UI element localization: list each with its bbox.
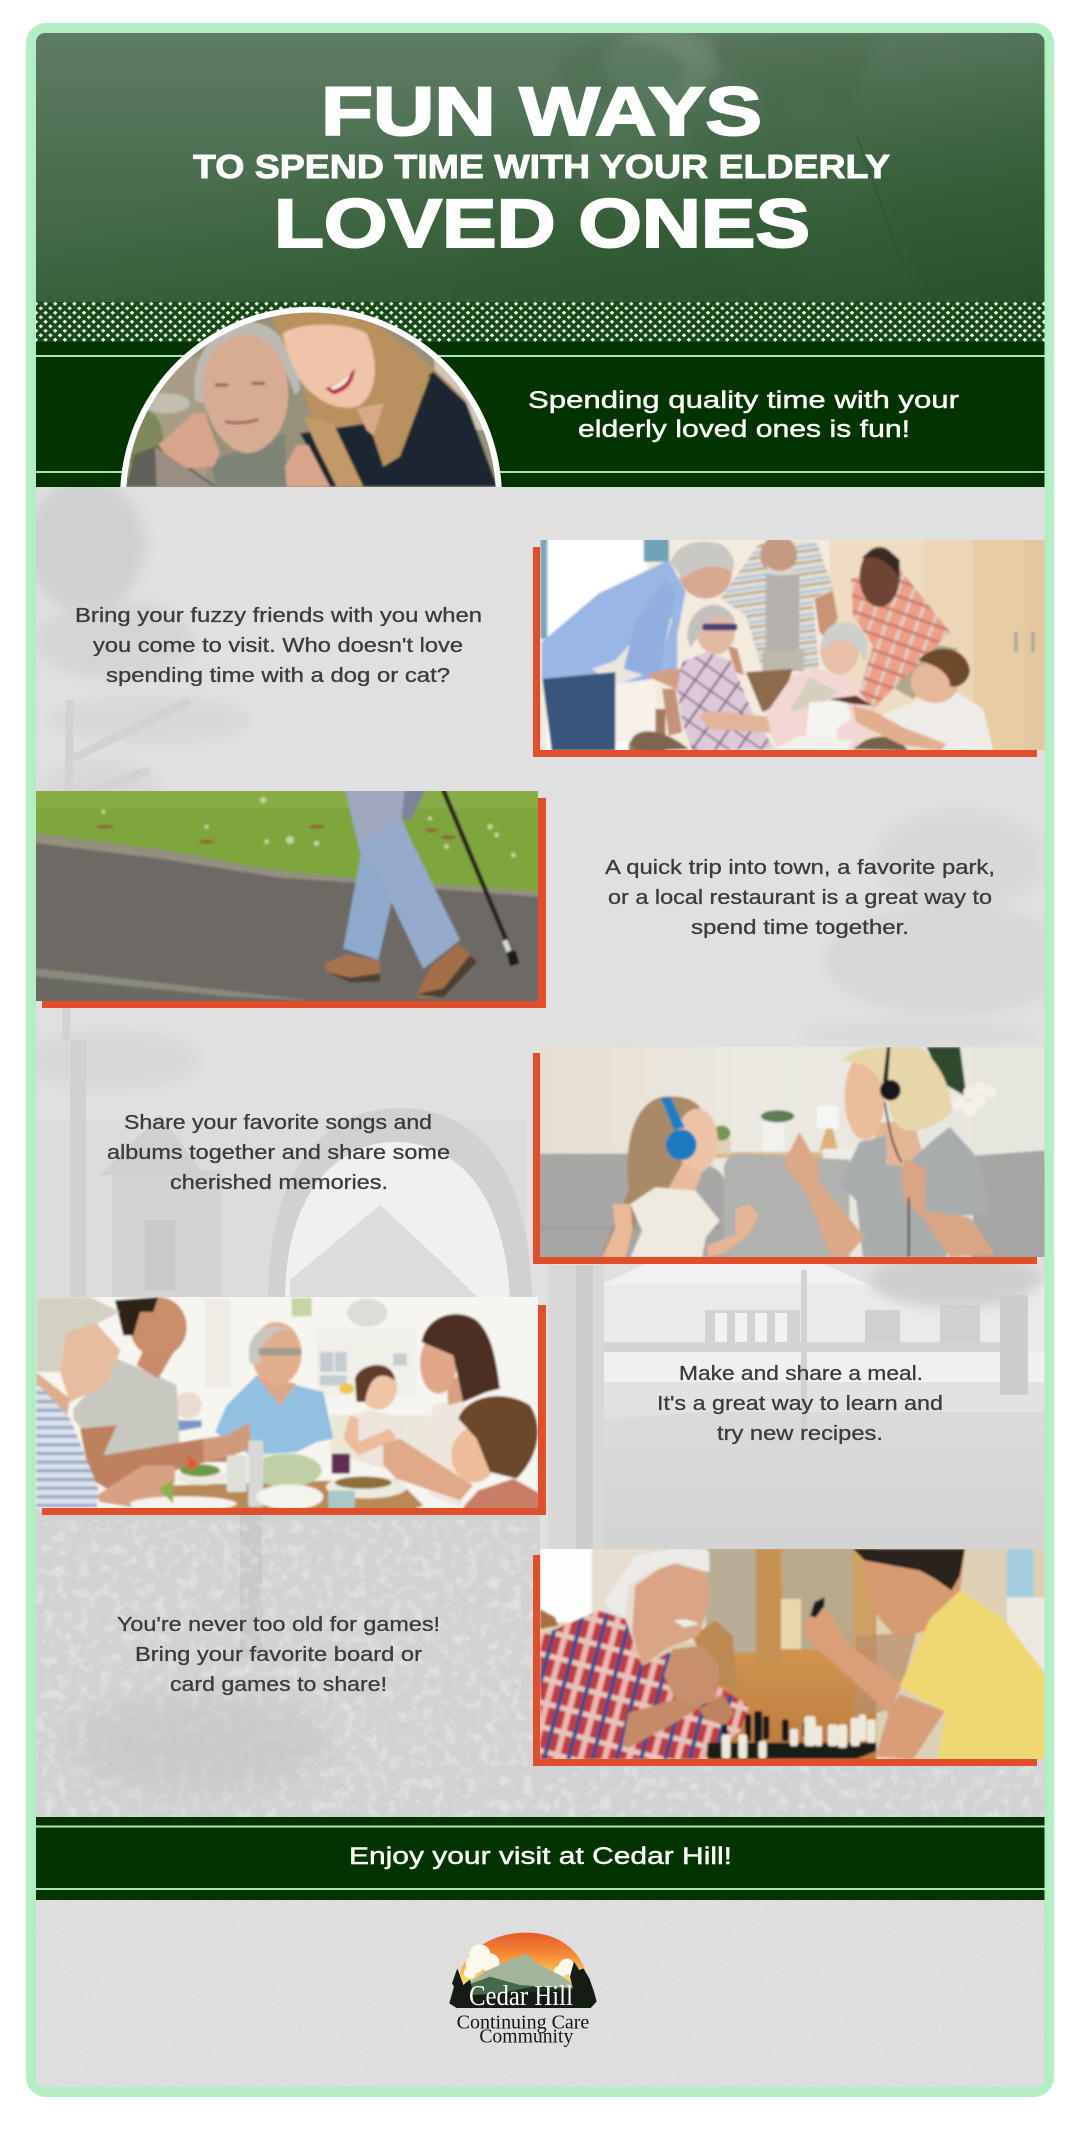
photo: grandfather and boy playing chess bbox=[540, 1549, 1044, 1759]
logo: Cedar Hill Continuing Care Community: Community bbox=[479, 2026, 573, 2048]
photo: person walking with a cane bbox=[30, 785, 550, 1010]
text: never too old for games bbox=[117, 1613, 440, 1696]
panel: intro banner bbox=[36, 302, 1045, 490]
accent: orange frame bbox=[42, 1305, 546, 1515]
text: fuzzy friends: you come to visit. Who doesn't love bbox=[93, 634, 463, 657]
panel: pets row bbox=[75, 535, 1050, 757]
panel: meal row bbox=[30, 1292, 943, 1517]
text: trip into town: A quick trip into town, a favorite park, bbox=[605, 856, 995, 879]
text: trip into town bbox=[605, 856, 995, 939]
text: make and share a meal: try new recipes. bbox=[717, 1422, 883, 1445]
title: LOVED ONES bbox=[274, 185, 810, 262]
text: never too old for games: You're never too old for games! bbox=[117, 1613, 440, 1636]
logo: Cedar Hill Continuing Care Community: Cedar Hill bbox=[469, 1981, 573, 2012]
panel: games row bbox=[117, 1542, 1057, 1770]
accent: orange frame bbox=[42, 798, 546, 1008]
intro text: elderly loved ones is fun! bbox=[578, 416, 910, 443]
text: favorite songs: Share your favorite songs and bbox=[124, 1111, 432, 1134]
text: make and share a meal: Make and share a meal. bbox=[679, 1362, 923, 1385]
accent: orange frame bbox=[533, 547, 1037, 757]
panel: grey background scene bbox=[20, 480, 1075, 2087]
title: FUN WAYS bbox=[321, 73, 762, 150]
accent: orange frame bbox=[533, 1053, 1037, 1264]
panel: music row bbox=[107, 1040, 1057, 1268]
text: never too old for games: Bring your favorite board or bbox=[135, 1643, 422, 1666]
title bbox=[192, 86, 890, 248]
logo: Cedar Hill Continuing Care Community: Continuing Care bbox=[457, 2011, 589, 2033]
intro text: Spending quality time with your bbox=[528, 387, 959, 414]
text: make and share a meal bbox=[657, 1362, 943, 1445]
panel: header background with ghost photo bbox=[36, 27, 1045, 303]
accent: orange frame bbox=[533, 1555, 1037, 1766]
logo: Cedar Hill Continuing Care Community bbox=[449, 1933, 597, 2048]
panel: closing banner bbox=[36, 1817, 1045, 1900]
text: make and share a meal: It's a great way to learn and bbox=[657, 1392, 943, 1415]
text: fuzzy friends: spending time with a dog or cat? bbox=[106, 664, 450, 687]
text: favorite songs bbox=[107, 1111, 450, 1194]
text: favorite songs: albums together and share some bbox=[107, 1141, 450, 1164]
text: trip into town: spend time together. bbox=[691, 916, 909, 939]
text: favorite songs: cherished memories. bbox=[170, 1171, 388, 1194]
panel: outing row bbox=[30, 785, 995, 1010]
text: closing message: Enjoy your visit at Cedar Hill! bbox=[349, 1843, 732, 1870]
text: trip into town: or a local restaurant is a great way to bbox=[608, 886, 992, 909]
text: fuzzy friends bbox=[75, 604, 482, 687]
intro text bbox=[528, 387, 959, 443]
photo: family sharing a meal bbox=[30, 1292, 550, 1517]
photo: woman and girl with headphones bbox=[540, 1047, 1044, 1257]
title: TO SPEND TIME WITH YOUR ELDERLY bbox=[193, 148, 890, 185]
photo: group with a kitten bbox=[535, 535, 1050, 756]
photo: elderly woman and younger woman bbox=[113, 303, 507, 490]
text: fuzzy friends: Bring your fuzzy friends with you when bbox=[75, 604, 482, 627]
text: never too old for games: card games to share! bbox=[170, 1673, 387, 1696]
